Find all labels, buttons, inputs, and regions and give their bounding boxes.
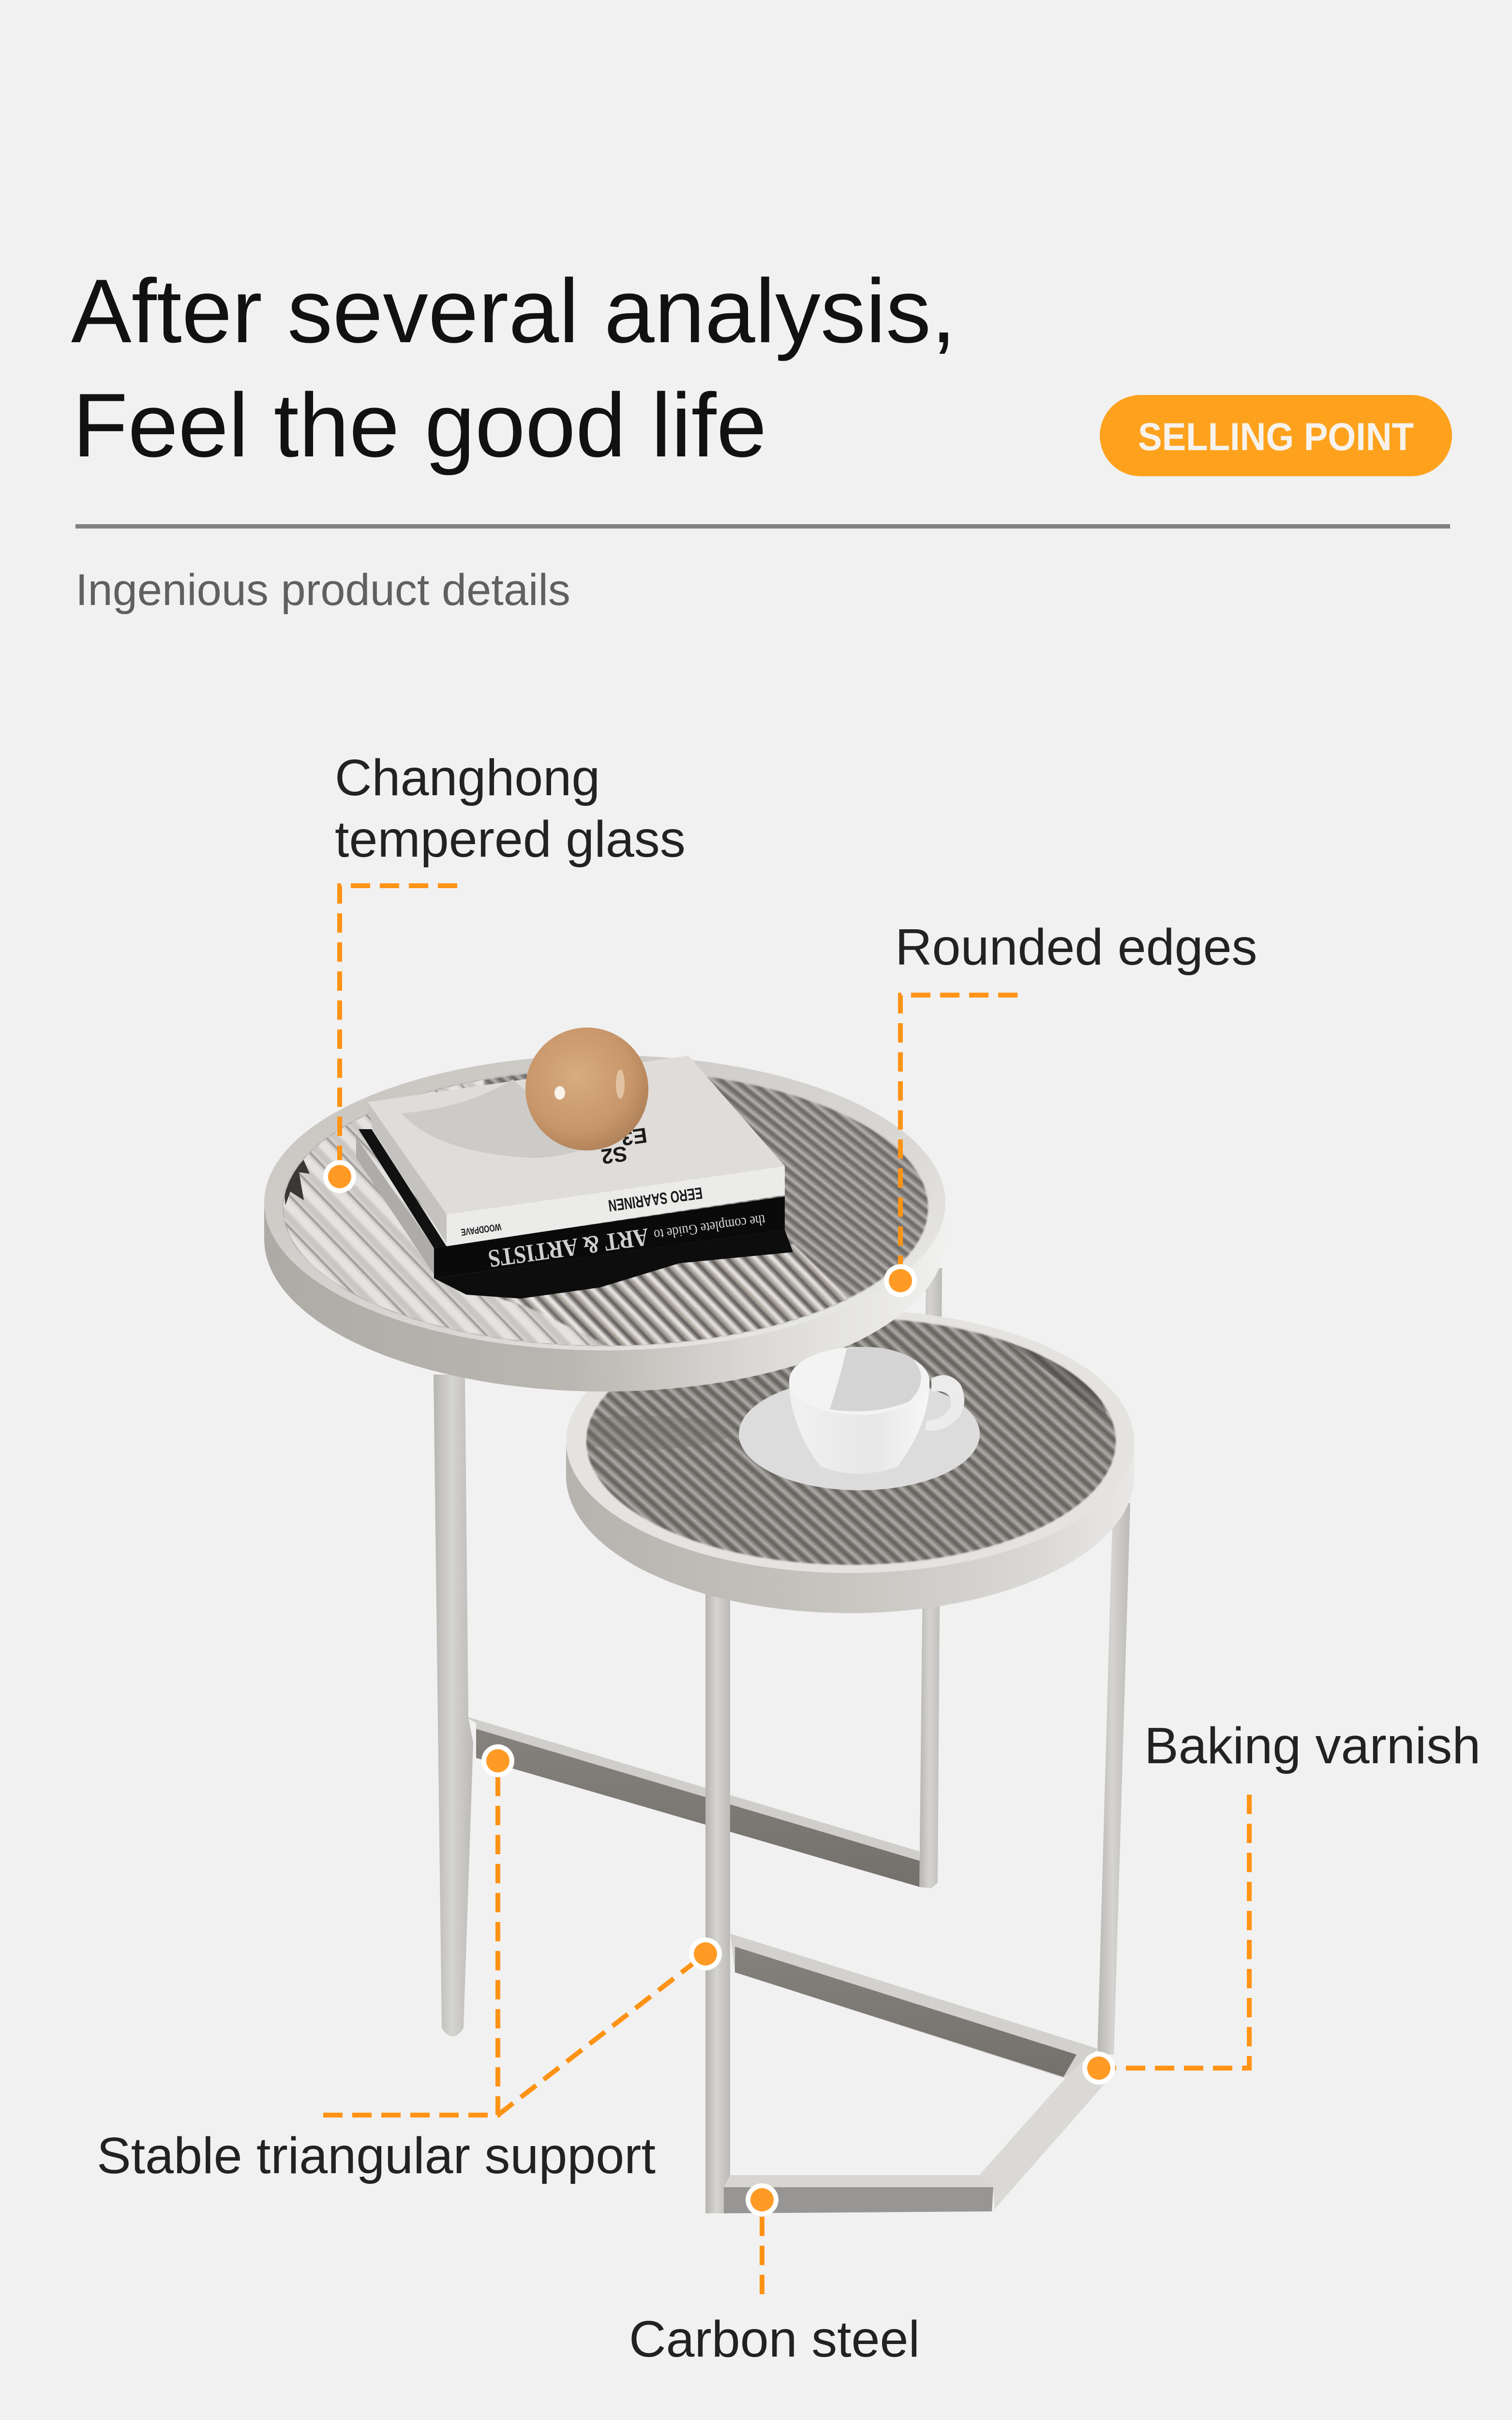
book lettering: S2 xyxy=(599,1141,629,1168)
white book cover xyxy=(368,1056,785,1214)
wooden ball xyxy=(525,1028,648,1150)
badge: selling point xyxy=(1100,395,1452,476)
book reflection on glass xyxy=(434,1230,793,1299)
dark rib tips at far left xyxy=(284,1160,310,1205)
black book edge xyxy=(359,1129,446,1248)
table one back leg xyxy=(919,1268,942,1888)
callout: Changhong tempered glass xyxy=(323,749,686,1193)
subtitle: Ingenious product details xyxy=(75,565,570,615)
table one front leg xyxy=(434,1375,473,2037)
coffee cup xyxy=(789,1347,964,1474)
book lettering: the complete Guide to xyxy=(653,1211,766,1243)
table two front leg xyxy=(705,1573,730,2213)
callout: Rounded edges xyxy=(884,919,1258,1297)
white book spine xyxy=(447,1166,785,1246)
callout: Baking varnish: Baking varnish xyxy=(1144,1717,1481,1774)
callout: Carbon steel: Carbon steel xyxy=(629,2311,920,2368)
book lettering xyxy=(460,1123,766,1272)
book stack xyxy=(356,1028,785,1278)
upper table top xyxy=(264,1055,945,1392)
callout: Carbon steel xyxy=(629,2183,920,2368)
callout: Stable triangular support xyxy=(97,1744,722,2184)
title xyxy=(71,260,956,476)
book lettering: EERO SAARINEN xyxy=(607,1183,704,1215)
table one crossbar xyxy=(464,1716,920,1887)
book lettering: WOODPAVE xyxy=(460,1221,502,1238)
cover shadow xyxy=(402,1079,624,1158)
callout: Stable triangular support: Stable triangular support xyxy=(97,2127,656,2184)
black book pages xyxy=(356,1137,434,1274)
table two crossbar xyxy=(730,1934,1098,2078)
shiny reflection under books xyxy=(497,1243,849,1346)
callout: Changhong tempered glass: Changhong xyxy=(335,749,600,806)
callout: Baking varnish xyxy=(1082,1717,1481,2085)
lower table top xyxy=(556,1307,1134,1613)
product illustration: nesting side tables xyxy=(264,1028,1134,2213)
title: After several analysis, xyxy=(71,260,956,362)
badge: selling point: SELLING POINT xyxy=(1138,415,1414,459)
table two angled foot xyxy=(979,2050,1109,2209)
book lettering: E3 xyxy=(619,1123,648,1150)
white book pages xyxy=(368,1102,447,1244)
book lettering: ART & ARTISTS xyxy=(487,1223,650,1272)
table two foot bar xyxy=(724,2175,993,2213)
callout: Rounded edges: Rounded edges xyxy=(895,919,1258,976)
title: Feel the good life xyxy=(73,375,767,476)
callout: Changhong tempered glass: tempered glass xyxy=(335,811,686,868)
saucer xyxy=(739,1378,980,1490)
table two back leg xyxy=(1097,1503,1130,2055)
black book spine xyxy=(434,1196,785,1278)
left glass reflection xyxy=(284,1080,599,1346)
